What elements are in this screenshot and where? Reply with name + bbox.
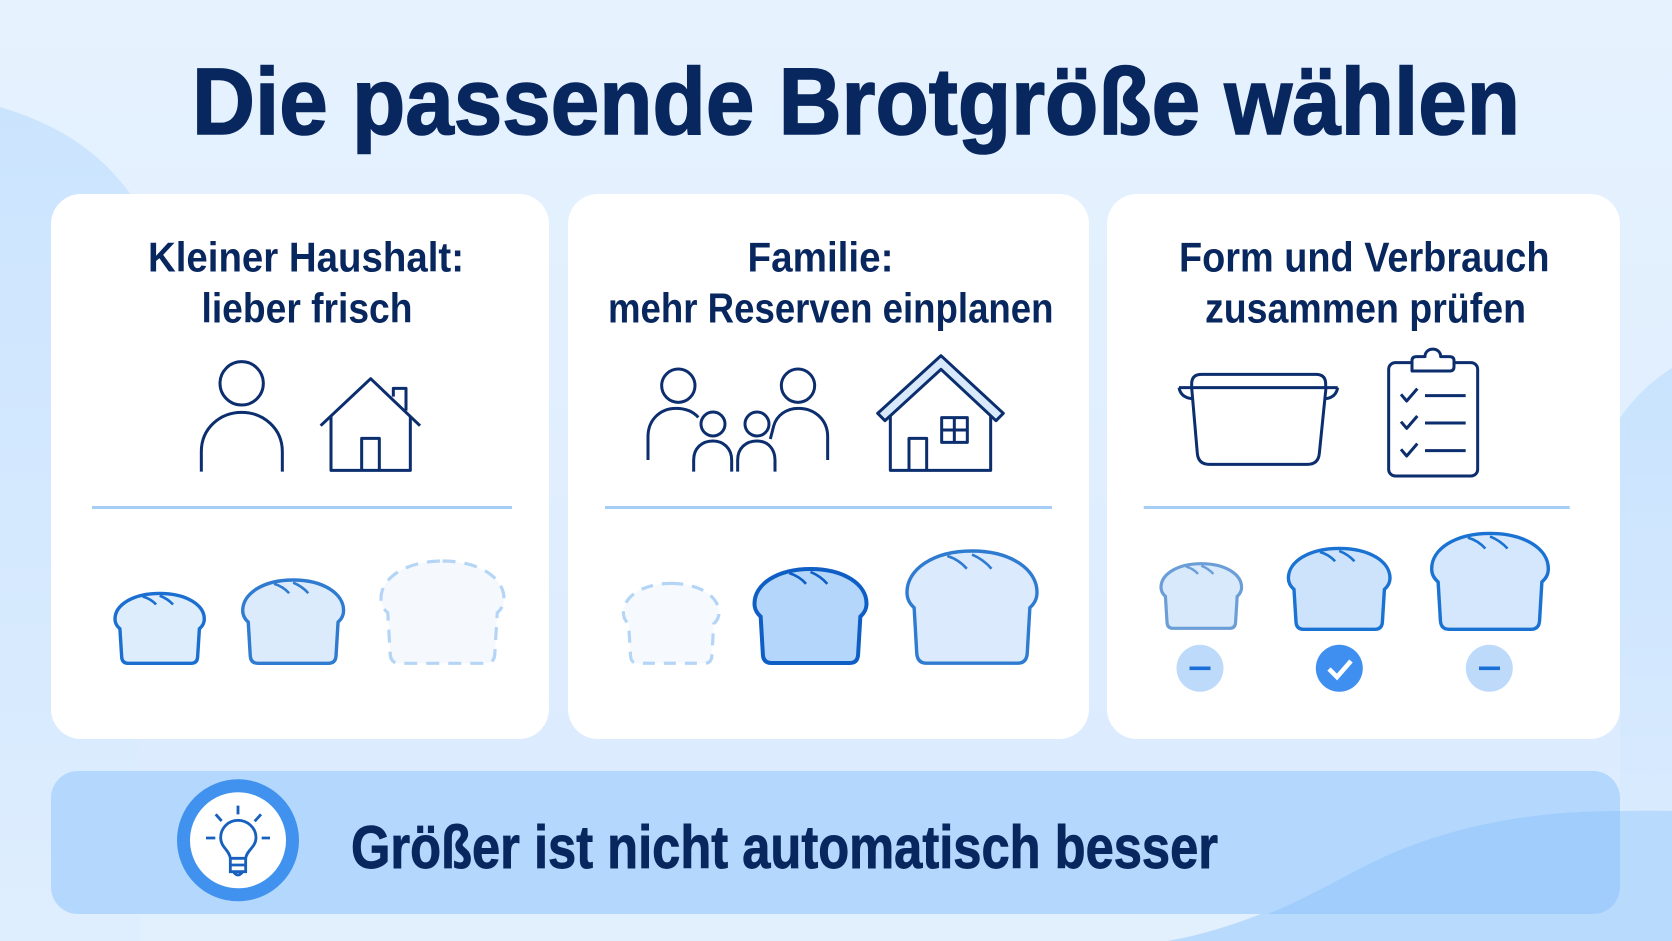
panel: Familie	[568, 194, 1089, 739]
panel: Form und Verbrauch	[1107, 194, 1620, 739]
title: Die passende Brotgröße wählen	[192, 49, 1520, 155]
bread loaf large dashed	[381, 561, 504, 663]
heading: kleiner Haushalt: Kleiner Haushalt:	[148, 234, 464, 280]
icon: person	[201, 362, 282, 472]
heading: Form und Verbrauch: Form und Verbrauch	[1179, 234, 1550, 280]
heading: kleiner Haushalt	[148, 234, 464, 332]
heading: Familie	[608, 234, 1054, 332]
icon: light bulb	[184, 786, 292, 895]
heading: kleiner Haushalt: lieber frisch	[202, 284, 412, 332]
icon: large house	[878, 356, 1003, 470]
icon: minus badge left	[1176, 645, 1224, 692]
heading: Form und Verbrauch	[1179, 234, 1550, 332]
bread loaf small	[115, 593, 204, 663]
icon: family	[648, 369, 828, 472]
icon: checklist	[1389, 349, 1478, 476]
icon: minus badge right	[1466, 645, 1513, 692]
callout text: Größer ist nicht automatisch besser	[351, 814, 1218, 881]
bread loaf medium highlighted	[754, 569, 866, 663]
bread loaf large	[907, 551, 1037, 663]
icon: baking pan	[1179, 374, 1338, 464]
heading: Form und Verbrauch: zusammen prüfen	[1205, 284, 1526, 332]
bread loaf small muted	[1161, 564, 1242, 628]
bread loaf small dashed	[623, 583, 719, 663]
heading: Familie: mehr Reserven einplanen	[608, 284, 1054, 332]
bread loaf large muted	[1432, 533, 1548, 629]
callout bar	[51, 771, 1620, 914]
panel: kleiner Haushalt	[51, 194, 549, 739]
heading: Familie: Familie:	[748, 234, 894, 280]
bread loaf medium	[243, 580, 344, 663]
icon: check badge	[1316, 645, 1363, 692]
bread loaf medium chosen	[1288, 548, 1390, 629]
icon: small house	[321, 379, 420, 470]
